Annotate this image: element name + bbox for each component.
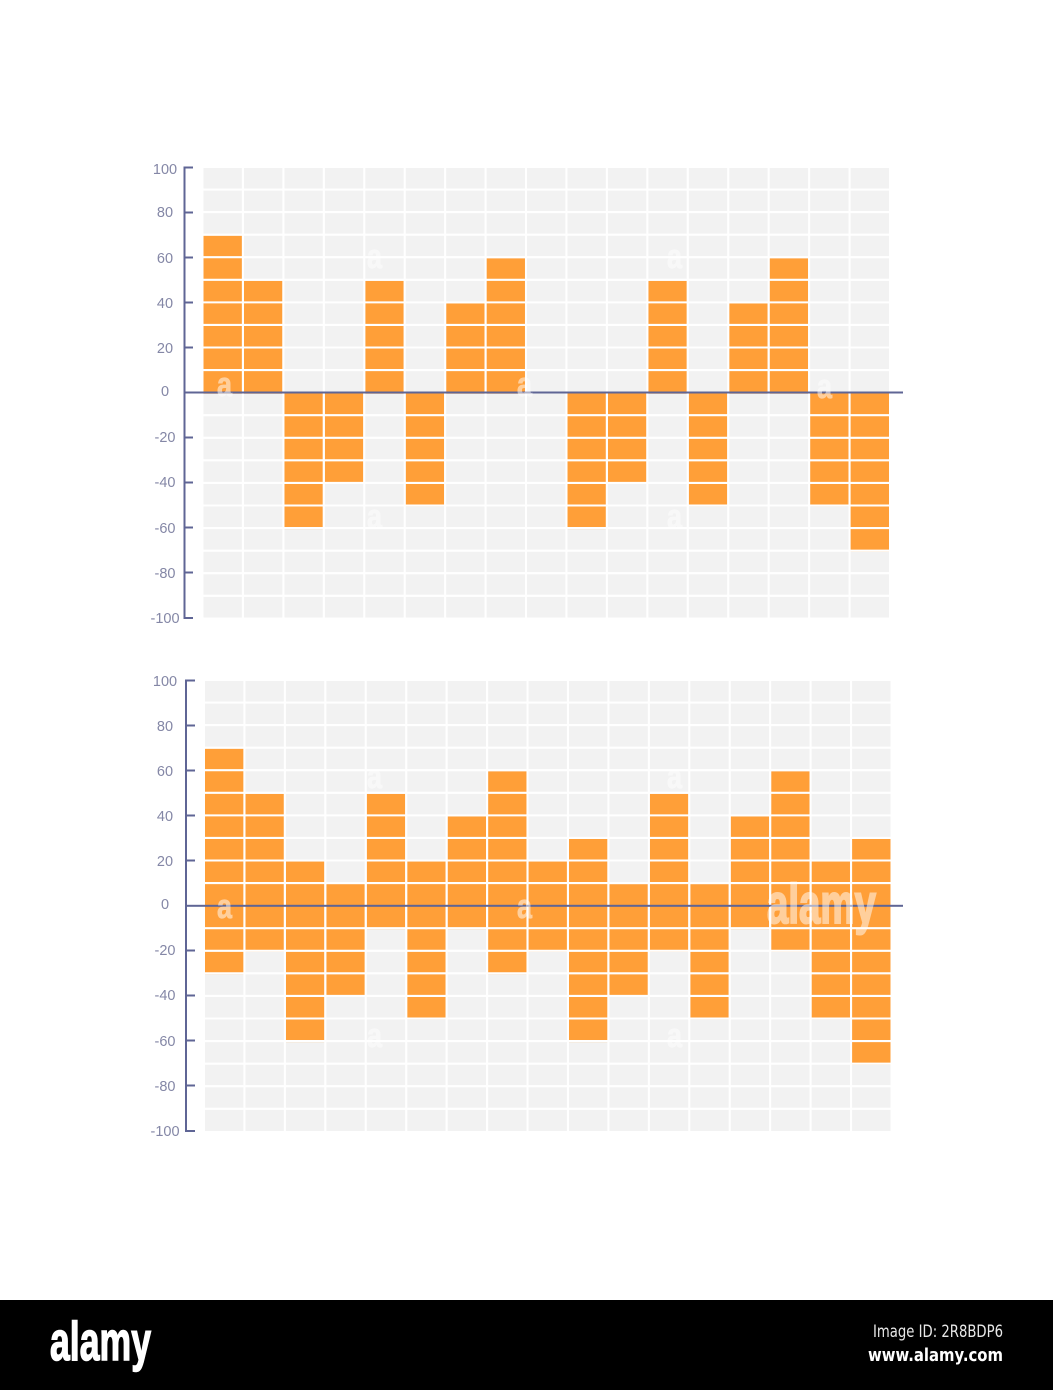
watermarks: a [517, 888, 533, 926]
y axis labels: -100 [150, 611, 180, 627]
y axis labels: 100 [153, 162, 177, 178]
y axis labels [150, 674, 180, 1140]
bars: top chart [204, 236, 889, 552]
y axis labels: 40 [157, 809, 173, 825]
chart: bottom diverging bar chart [150, 674, 903, 1140]
watermarks: a [217, 888, 233, 926]
watermarks [217, 238, 876, 1055]
y axis labels: -20 [155, 430, 175, 446]
y axis labels: -80 [155, 566, 175, 582]
grid background [205, 681, 890, 1131]
image id: Image ID: 2R8BDP6 [873, 1322, 1003, 1341]
footer logo: alamy [50, 1310, 151, 1372]
y axis labels: 0 [161, 897, 169, 913]
watermarks: a [517, 366, 533, 404]
watermarks: a [667, 1017, 683, 1055]
watermarks: a [667, 758, 683, 796]
y axis with ticks [184, 168, 193, 618]
watermarks: a [367, 238, 383, 276]
y axis labels: 80 [157, 719, 173, 735]
y axis labels: 20 [157, 341, 173, 357]
y axis labels: -20 [155, 943, 175, 959]
watermarks: a [217, 366, 233, 404]
y axis labels: -80 [155, 1079, 175, 1095]
y axis labels: -60 [155, 1034, 175, 1050]
y axis labels [150, 162, 180, 627]
watermarks: a [367, 1017, 383, 1055]
y axis labels: 60 [157, 251, 173, 267]
y axis labels: 20 [157, 854, 173, 870]
y axis with ticks [186, 680, 195, 1131]
y axis labels: -100 [150, 1124, 180, 1140]
watermarks: a [367, 498, 383, 536]
y axis labels: -40 [155, 475, 175, 491]
grid background [204, 168, 889, 618]
y axis labels: 60 [157, 764, 173, 780]
watermarks: a [367, 758, 383, 796]
watermarks: alamy [767, 872, 876, 935]
website: www.alamy.com [868, 1345, 1003, 1366]
y axis labels: 80 [157, 205, 173, 221]
watermarks: a [817, 368, 833, 406]
y axis labels: -60 [155, 521, 175, 537]
y axis labels: -40 [155, 988, 175, 1004]
y axis labels: 0 [161, 384, 169, 400]
y axis labels: 100 [153, 674, 177, 690]
zero line [184, 392, 903, 394]
bars: bottom chart [205, 749, 890, 1065]
zero line [186, 905, 903, 907]
footer bar [0, 1300, 1053, 1390]
y axis labels: 40 [157, 296, 173, 312]
watermarks: a [667, 498, 683, 536]
chart: top diverging bar chart [150, 162, 903, 627]
watermarks: a [667, 238, 683, 276]
